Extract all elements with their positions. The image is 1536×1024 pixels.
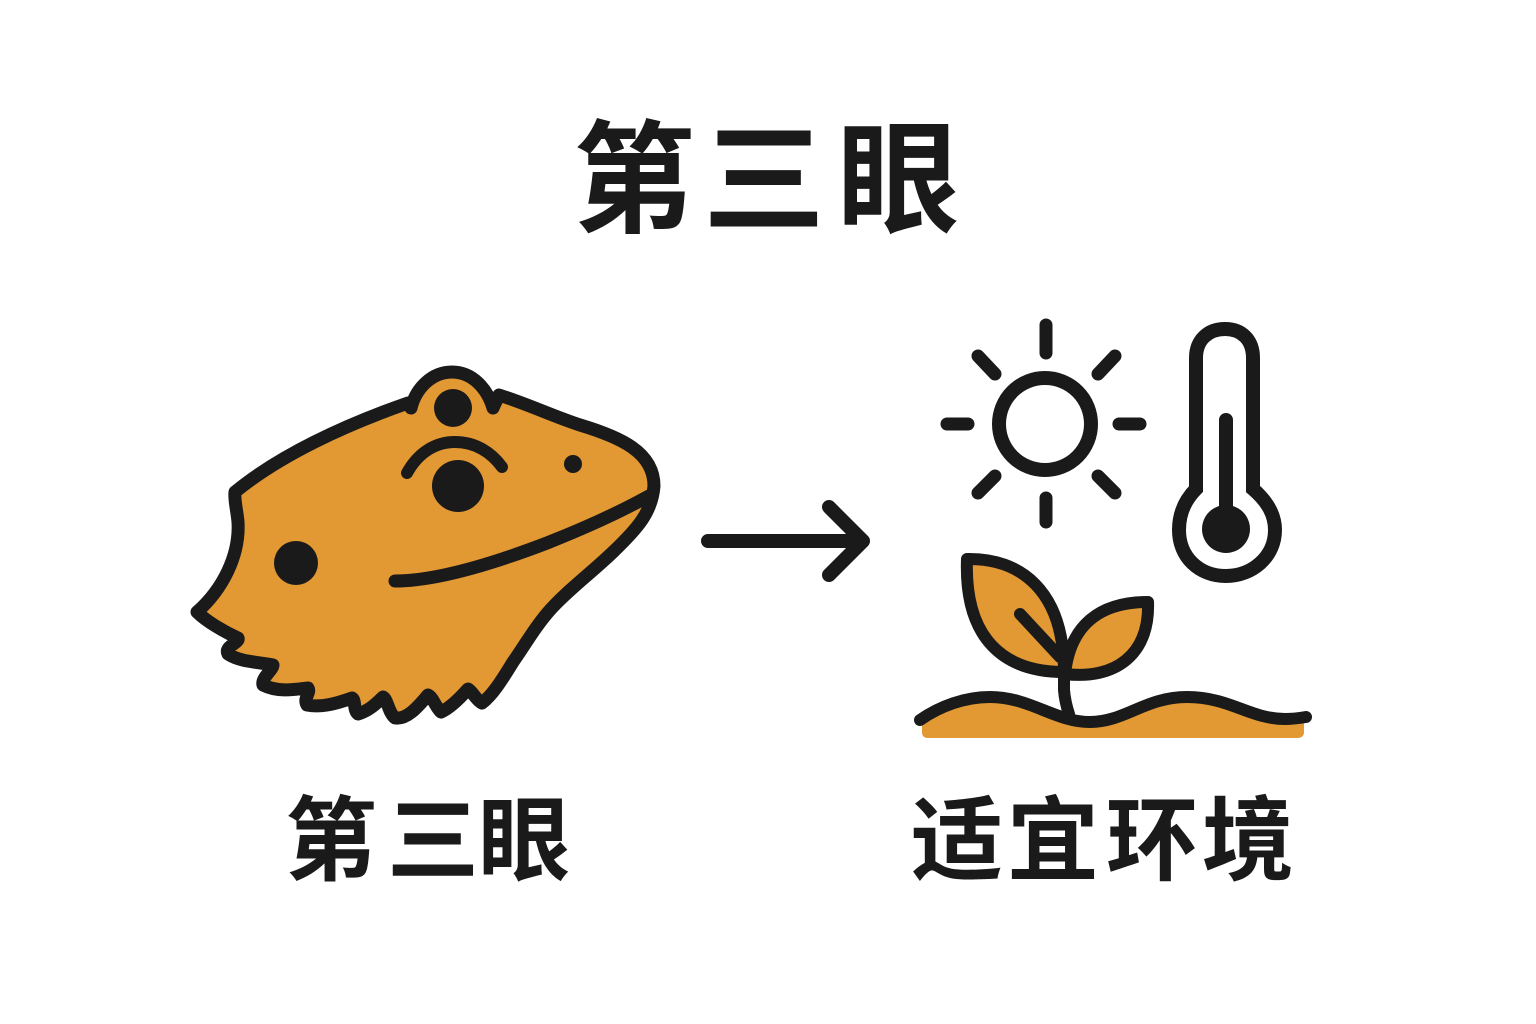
- icon: thermometer: [1179, 329, 1275, 576]
- brow: [407, 442, 502, 473]
- third eye: [434, 389, 472, 427]
- eye: [432, 460, 484, 512]
- label: third eye: 第三眼: [285, 791, 570, 893]
- arrow: [708, 507, 863, 575]
- right leaf: [1065, 602, 1148, 675]
- left leaf: [967, 559, 1064, 672]
- icon: sun: [947, 325, 1140, 522]
- soil: [922, 697, 1304, 738]
- icon: bearded dragon head with third eye: [197, 372, 654, 718]
- nostril: [564, 455, 582, 473]
- ground line: [920, 697, 1306, 722]
- title: 第三眼: [573, 113, 959, 249]
- label: suitable environment: 适宜环境: [911, 791, 1294, 893]
- stem and vein: [1020, 614, 1069, 714]
- ear: [274, 541, 318, 585]
- icon: sprout and soil: [920, 559, 1306, 738]
- mouth: [395, 496, 649, 581]
